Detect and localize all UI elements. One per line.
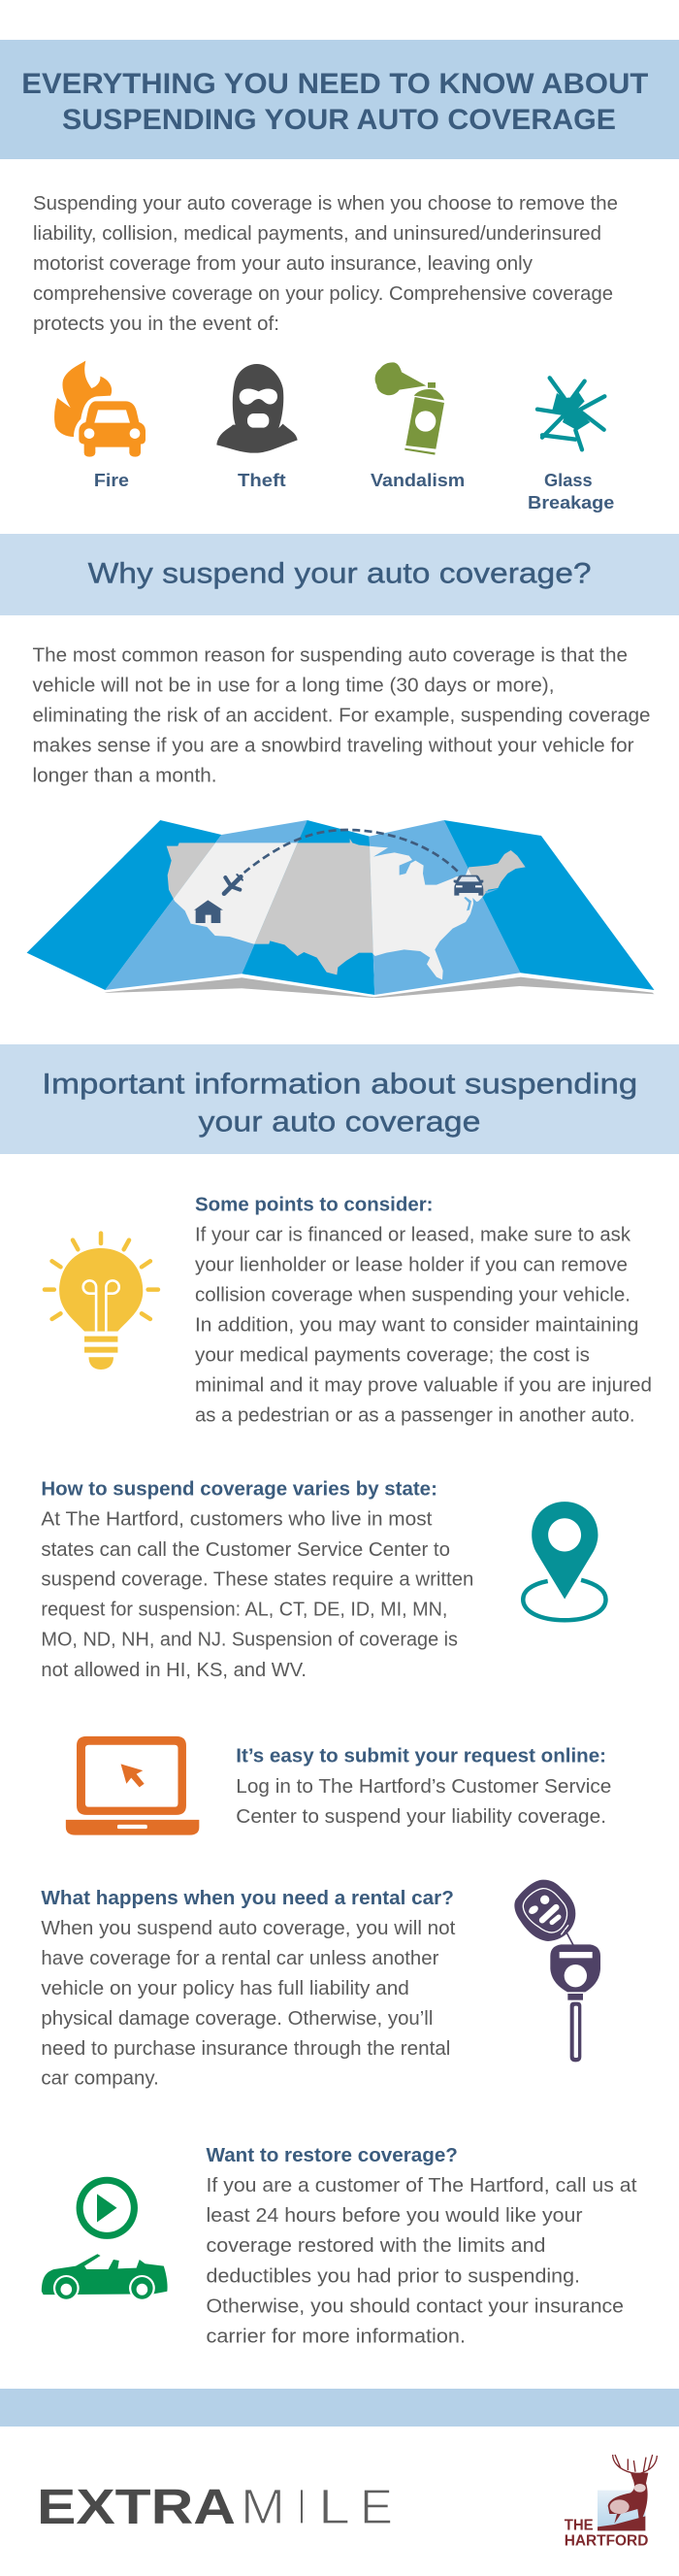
text block: submit request online: Log in to The Hartford’s Customer Service [236,1775,611,1798]
icon labels: Theft [238,470,286,490]
text block: restore coverage: Want to restore coverage? [206,2144,458,2166]
icon: house [194,900,223,923]
text block: some points to consider: your medical payments coverage; the cost is [195,1343,590,1366]
intro paragraph [33,192,618,335]
why suspend paragraph: makes sense if you are a snowbird traveling without your vehicle for [33,735,634,757]
logo: Extra Mile: I [298,2479,306,2534]
text block: restore coverage: coverage restored with the limits and [206,2234,545,2257]
text block: some points to consider: In addition, you may want to consider maintaining [195,1313,638,1336]
text block: rental car: When you suspend auto coverage, you will not [41,1917,456,1939]
logo: The Hartford stag: THE [565,2518,594,2534]
icon labels: Breakage [528,492,614,512]
text block: some points to consider: your lienholder or lease holder if you can remove [195,1253,628,1275]
route arc [244,830,458,873]
text block: restore coverage: deductibles you had prior to suspending. [206,2264,580,2287]
heading band: important information: your auto coverage [198,1106,481,1139]
heading band: why suspend: Why suspend your auto coverage? [88,558,592,590]
text block: how to suspend varies by state: suspend coverage. These states require a written [41,1569,473,1591]
icon labels: Vandalism [371,470,465,490]
text block: rental car: car company. [41,2066,159,2089]
intro paragraph: protects you in the event of: [33,313,279,335]
icon: green play button and convertible [42,2177,168,2301]
text block: some points to consider: Some points to consider: [195,1194,433,1216]
text block: some points to consider: collision coverage when suspending your vehicle. [195,1283,630,1305]
why suspend paragraph: vehicle will not be in use for a long time (30 days or more), [33,675,555,697]
text block: some points to consider: If your car is financed or leased, make sure to ask [195,1223,631,1245]
text block: some points to consider: minimal and it may prove valuable if you are injured [195,1373,652,1396]
why suspend paragraph: eliminating the risk of an accident. For example, suspending coverage [33,705,651,727]
icon: light bulb [45,1234,158,1370]
text block: some points to consider [195,1194,652,1426]
text block: rental car [41,1887,456,2089]
icon labels: Glass [544,470,593,490]
text block: restore coverage [206,2144,637,2348]
icon: car on map [454,875,483,896]
intro paragraph: liability, collision, medical payments, and uninsured/underinsured [33,222,601,245]
icon: plane [224,875,242,894]
text block: how to suspend varies by state: MO, ND, NH, and NJ. Suspension of coverage is [41,1629,458,1651]
logo: The Hartford stag: HARTFORD [565,2533,648,2550]
logo: Extra Mile: M [241,2479,285,2534]
text block: some points to consider: as a pedestrian or as a passenger in another auto. [195,1404,634,1426]
folded map of the United States [27,820,654,998]
text block: how to suspend varies by state: How to suspend coverage varies by state: [41,1477,437,1500]
intro paragraph: motorist coverage from your auto insurance, leaving only [33,252,534,275]
icon: car key and fob [514,1880,600,2062]
text block: how to suspend varies by state: not allowed in HI, KS, and WV. [41,1659,307,1681]
text block: rental car: What happens when you need a rental car? [41,1887,454,1909]
icon: spray can [375,362,444,455]
heading band: important information [0,1044,679,1154]
text block: how to suspend varies by state: request for suspension: AL, CT, DE, ID, MI, MN, [41,1599,447,1621]
text block: how to suspend varies by state: At The Hartford, customers who live in most [41,1508,433,1531]
text block: how to suspend varies by state: states can call the Customer Service Center to [41,1538,450,1561]
logo: Extra Mile: E [360,2479,393,2534]
icon labels [94,470,614,512]
why suspend paragraph: longer than a month. [33,764,217,786]
logo: Extra Mile: EXTRA [37,2479,236,2534]
intro paragraph: Suspending your auto coverage is when you choose to remove the [33,192,618,215]
logo: Extra Mile [37,2479,393,2534]
text block: submit request online [236,1745,611,1828]
title banner: SUSPENDING YOUR AUTO COVERAGE [62,104,616,136]
heading band: important information: Important information about suspending [42,1069,637,1101]
text block: rental car: vehicle on your policy has full liability and [41,1977,409,1999]
why suspend paragraph: The most common reason for suspending auto coverage is that the [33,644,628,667]
heading band: why suspend [0,534,679,615]
logo: The Hartford stag [565,2455,657,2550]
text block: how to suspend varies by state [41,1477,473,1681]
text block: restore coverage: least 24 hours before you would like your [206,2204,583,2227]
text block: rental car: need to purchase insurance through the rental [41,2037,450,2060]
text block: restore coverage: carrier for more information. [206,2326,466,2348]
icon: location pin [523,1502,606,1620]
title banner: EVERYTHING YOU NEED TO KNOW ABOUT [21,68,648,100]
icon labels: Fire [94,470,129,490]
logo: Extra Mile: L [318,2479,350,2534]
title banner [0,40,679,159]
text block: restore coverage: If you are a customer of The Hartford, call us at [206,2174,637,2196]
icon: laptop with cursor [66,1736,199,1835]
footer band [0,2389,679,2427]
icon: fire and car [54,361,146,457]
intro paragraph: comprehensive coverage on your policy. Comprehensive coverage [33,282,613,305]
text block: submit request online: Center to suspend your liability coverage. [236,1805,606,1828]
icon: broken glass [537,378,604,449]
text block: rental car: physical damage coverage. Otherwise, you’ll [41,2007,433,2030]
text block: rental car: have coverage for a rental car unless another [41,1947,439,1969]
text block: restore coverage: Otherwise, you should contact your insurance [206,2295,624,2318]
text block: submit request online: It’s easy to submit your request online: [236,1745,606,1767]
icon: ski mask [216,364,298,453]
why suspend paragraph [33,644,651,786]
